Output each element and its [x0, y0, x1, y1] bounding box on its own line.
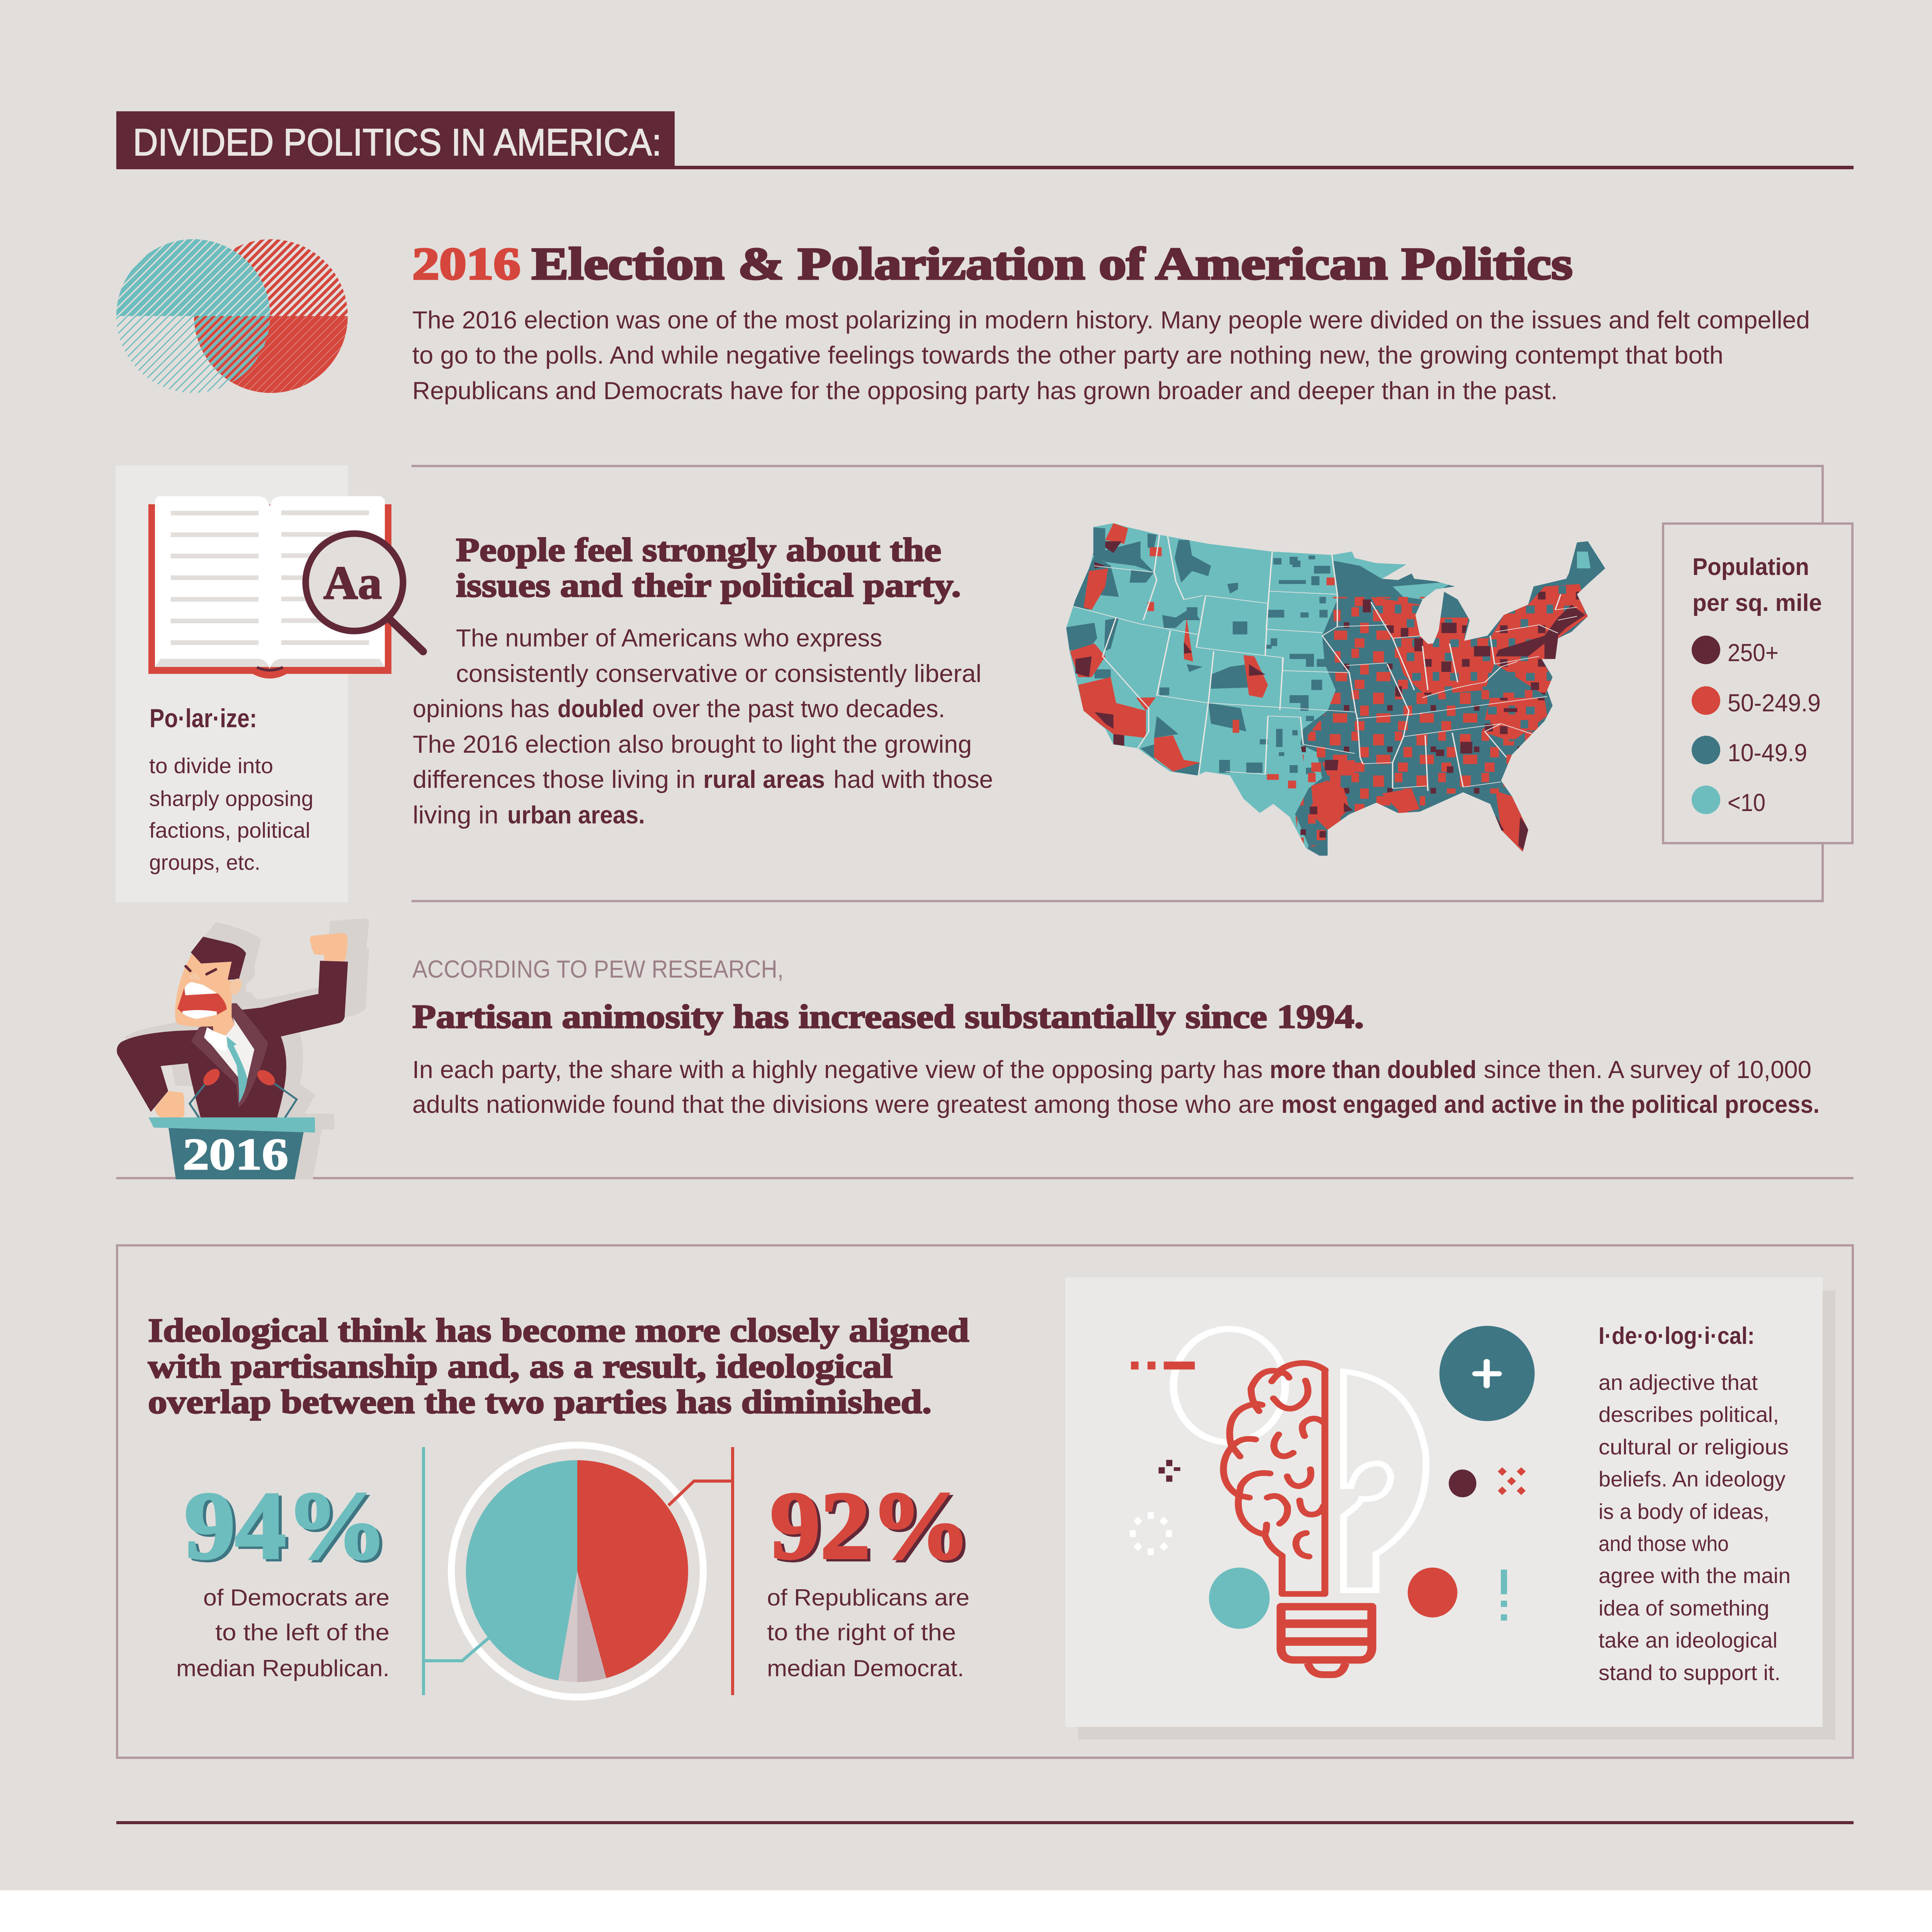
heading: people feel strongly: People feel strongly about the: [456, 531, 941, 568]
illustration: shouting politician at podium: [117, 918, 369, 1179]
definition: [149, 753, 313, 874]
icon: open book with magnifier: Aa: [323, 557, 382, 609]
legend title: Population: [1692, 554, 1809, 580]
heading: people feel strongly: issues and their political party.: [456, 566, 961, 604]
intro paragraph: Republicans and Democrats have for the opposing party has grown broader and deeper than in the past.: [412, 377, 1558, 405]
paragraph: americans opinions: urban areas.: [507, 801, 645, 829]
definition: ideological: an adjective that: [1599, 1370, 1758, 1395]
stat text: democrats: of Democrats are: [203, 1585, 389, 1611]
heading: people feel strongly: [456, 531, 961, 604]
definition: factions, political: [149, 818, 310, 842]
legend title: per sq. mile: [1692, 590, 1822, 616]
title: Election & Polarization of American Politics: [532, 238, 1573, 289]
jacket: [117, 961, 348, 1118]
header banner: DIVIDED POLITICS IN AMERICA:: [133, 121, 662, 163]
panel: ideological overlap: [117, 1245, 1853, 1758]
stat text: republicans: to the right of the: [767, 1619, 956, 1645]
raised fist: [310, 933, 347, 961]
panel: polarize definition: [116, 466, 423, 902]
stat text: democrats: median Republican.: [176, 1655, 389, 1681]
definition: ideological: stand to support it.: [1599, 1660, 1781, 1685]
intro paragraph: [412, 306, 1810, 405]
legend item under 10: [1692, 786, 1765, 816]
divider under pew section: [116, 1177, 1854, 1179]
state borders: [1074, 535, 1577, 791]
stat text: republicans: of Republicans are: [767, 1585, 969, 1611]
paragraph: americans opinions: consistently conservative or consistently liberal: [456, 660, 981, 687]
map: population density of US counties: [1066, 523, 1605, 855]
definition: ideological: [1599, 1370, 1791, 1685]
east dark teal region: [1295, 541, 1605, 855]
west red counties: [1070, 523, 1528, 852]
pew kicker: ACCORDING TO PEW RESEARCH,: [412, 955, 784, 983]
heading: ideological think: overlap between the two parties has diminished.: [148, 1383, 932, 1420]
podium year: 2016: [183, 1130, 288, 1179]
definition: groups, etc.: [149, 850, 260, 874]
icon: overlapping striped circles: [116, 239, 349, 393]
section frame lines: [412, 466, 1823, 901]
heading: partisan animosity: Partisan animosity has increased substantially since 1994.: [412, 998, 1364, 1035]
legend item 10-49.9: [1692, 736, 1807, 767]
paragraph: partisan survey: more than doubled: [1270, 1056, 1476, 1083]
icon: open book with magnifier: [148, 496, 423, 679]
legend item under 10: <10: [1728, 789, 1765, 816]
stat: 94 percent: 94%: [184, 1472, 388, 1579]
intro paragraph: to go to the polls. And while negative feelings towards the other party are nothing new, the growing contempt that both: [412, 341, 1723, 369]
definition: ideological: and those who: [1599, 1531, 1729, 1556]
legend item 50-249.9: 50-249.9: [1728, 689, 1821, 717]
stat: 92 percent: 92%: [770, 1472, 971, 1579]
definition: ideological: is a body of ideas,: [1599, 1499, 1769, 1524]
legend title: [1692, 554, 1822, 616]
paragraph: americans opinions: rural areas: [703, 765, 825, 793]
paragraph: americans opinions: The number of Americans who express: [456, 624, 882, 652]
legend item 250+: 250+: [1728, 639, 1779, 667]
term: Po·lar·ize:: [150, 704, 257, 733]
stat text: democrats: to the left of the: [215, 1619, 389, 1645]
paragraph: americans opinions: opinions has: [413, 695, 549, 723]
paragraph: americans opinions: had with those: [833, 765, 993, 793]
mouth: [177, 988, 227, 1019]
pie chart with callout lines: [422, 1445, 734, 1697]
microphones: [190, 1082, 297, 1118]
definition: ideological: describes political,: [1599, 1402, 1779, 1427]
panel: ideological definition: [1065, 1277, 1835, 1740]
lapel: [191, 1003, 268, 1108]
legend item 50-249.9: [1692, 686, 1821, 717]
stat text: republicans: [767, 1585, 969, 1681]
podium: [168, 1128, 304, 1179]
section rule: [116, 1821, 1854, 1824]
heading: ideological think: with partisanship and, as a result, ideological: [148, 1347, 893, 1385]
term: ideological: I·de·o·log·i·cal:: [1599, 1323, 1755, 1349]
tie: [227, 1036, 247, 1103]
paragraph: americans opinions: over the past two decades.: [652, 695, 945, 723]
paragraph: americans opinions: differences those living in: [413, 765, 696, 793]
definition: to divide into: [149, 753, 273, 778]
paragraph: partisan survey: adults nationwide found that the divisions were greatest among those who are: [412, 1090, 1274, 1118]
west dark county patches: [1062, 527, 1330, 776]
title: 2016: [412, 238, 520, 289]
definition: ideological: cultural or religious: [1599, 1435, 1789, 1459]
intro paragraph: The 2016 election was one of the most polarizing in modern history. Many people were divided on the issues and felt compelled: [412, 306, 1810, 334]
paragraph: partisan survey: In each party, the share with a highly negative view of the opposing party has: [412, 1056, 1263, 1083]
lower hand: [155, 1091, 184, 1117]
sparse red counties east: [1295, 597, 1425, 850]
maroon dense metro counties: [1075, 541, 1585, 852]
panel: think it through: [0, 1890, 1932, 1932]
stat text: republicans: median Democrat.: [767, 1655, 964, 1681]
hair: [191, 937, 246, 980]
paragraph: americans opinions: [413, 624, 993, 829]
legend item 10-49.9: 10-49.9: [1728, 739, 1807, 767]
definition: ideological: beliefs. An ideology: [1599, 1467, 1786, 1491]
definition: sharply opposing: [149, 786, 313, 811]
paragraph: americans opinions: doubled: [558, 695, 644, 723]
header banner: [116, 111, 1854, 169]
paragraph: americans opinions: The 2016 election also brought to light the growing: [413, 730, 972, 758]
paragraph: partisan survey: [412, 1056, 1820, 1118]
heading: ideological think: [148, 1311, 969, 1420]
legend: population per sq. mile: [1663, 524, 1852, 843]
icon: brain light bulb: [1129, 1326, 1535, 1675]
face: [175, 952, 235, 1036]
paragraph: partisan survey: most engaged and active in the political process.: [1281, 1090, 1820, 1118]
definition: ideological: idea of something: [1599, 1596, 1769, 1620]
dense red counties: [1371, 584, 1588, 742]
legend item 250+: [1692, 636, 1779, 667]
paragraph: partisan survey: since then. A survey of 10,000: [1484, 1056, 1811, 1083]
shirt: [206, 1017, 254, 1079]
paragraph: americans opinions: living in: [413, 801, 498, 829]
definition: ideological: take an ideological: [1599, 1628, 1777, 1652]
stat text: democrats: [176, 1585, 389, 1681]
heading: ideological think: Ideological think has become more closely aligned: [148, 1311, 969, 1349]
definition: ideological: agree with the main: [1599, 1563, 1791, 1588]
